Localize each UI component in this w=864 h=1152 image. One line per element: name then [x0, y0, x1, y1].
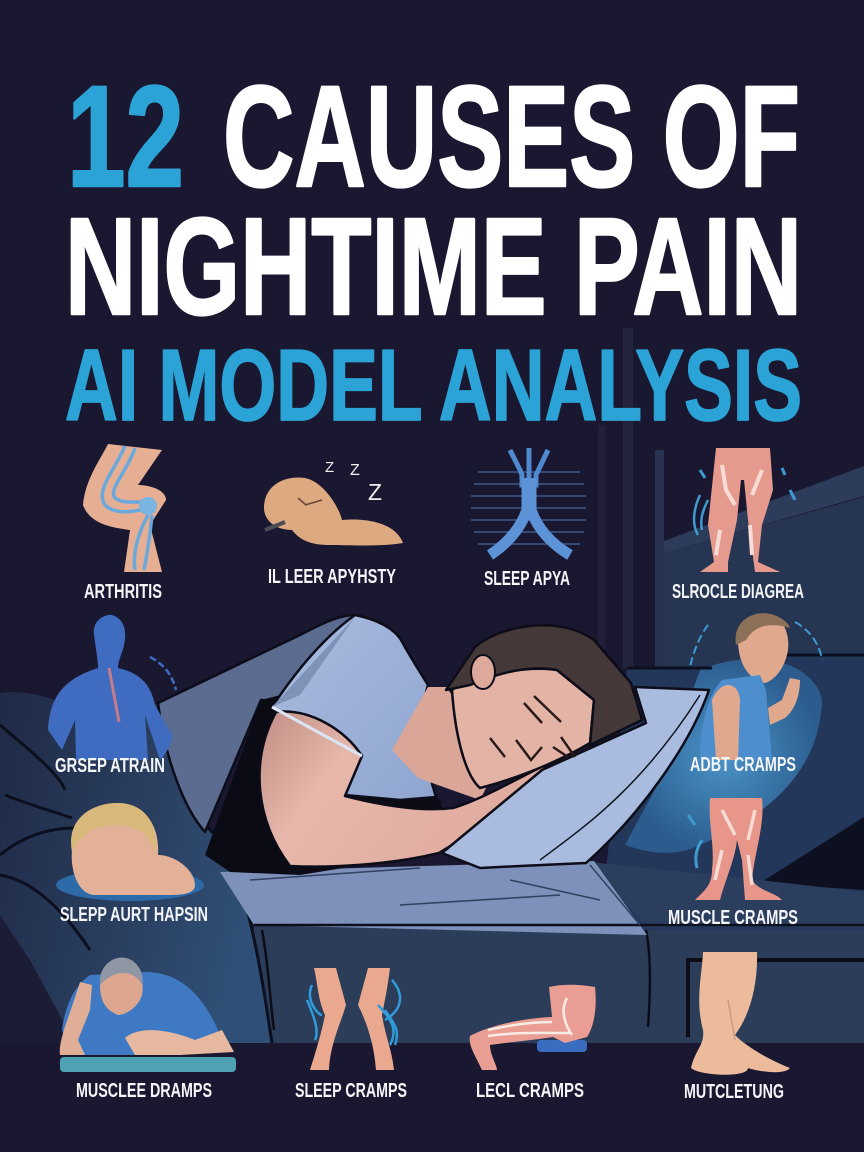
icon: sleeping blond person [56, 803, 204, 901]
icon: sleeping head: Z [350, 462, 360, 479]
icon: knees [307, 968, 400, 1070]
icon: legs [694, 448, 795, 572]
bed front [254, 925, 864, 1043]
shirt [272, 615, 436, 800]
label: muscle cramps: MUSCLE CRAMPS [668, 907, 798, 929]
right bedding [600, 653, 864, 930]
label: lecl cramps: LECL CRAMPS [476, 1080, 584, 1102]
icon: man with fist [690, 613, 822, 760]
icon: standing legs [691, 952, 790, 1075]
label: slepp aurt hapsin: SLEPP AURT HAPSIN [60, 904, 208, 926]
label: mutcletung: MUTCLETUNG [684, 1081, 784, 1103]
hair [446, 625, 642, 745]
icon: foot and calf [470, 985, 596, 1070]
left blanket [0, 692, 272, 1043]
icon: airway [471, 448, 586, 555]
label: sleep apya: SLEEP APYA [484, 568, 570, 590]
icon: sleeping head [264, 459, 403, 546]
label: il leer apyhsty: IL LEER APYHSTY [268, 566, 396, 588]
neck [392, 687, 500, 800]
face lines [490, 696, 575, 760]
label: grsep atrain: GRSEP ATRAIN [55, 755, 165, 777]
gray sleeve blanket [158, 615, 355, 832]
pillow [442, 687, 709, 868]
title [65, 56, 802, 442]
lower right sheet [590, 862, 864, 927]
icon: cramped calves [688, 798, 782, 900]
window and headboard [598, 328, 864, 700]
bed illustration [0, 615, 864, 1152]
bed frame line [688, 960, 864, 1037]
face [452, 669, 594, 788]
arm [260, 712, 545, 867]
label: slrocle diagrea: SLROCLE DIAGREA [672, 581, 804, 603]
dark wedge [760, 817, 864, 890]
label: sleep cramps: SLEEP CRAMPS [295, 1080, 407, 1102]
label: adbt cramps: ADBT CRAMPS [690, 754, 796, 776]
black undershadow [205, 690, 455, 875]
floor [0, 1043, 864, 1152]
glow on bedding [625, 659, 822, 853]
label: arthritis: ARTHRITIS [84, 581, 162, 603]
title: 12 [67, 56, 184, 217]
icon: sleeping head: Z [368, 479, 382, 505]
label: musclee dramps: MUSCLEE DRAMPS [76, 1080, 212, 1102]
ear [471, 655, 495, 689]
icon: blue figure [48, 615, 176, 760]
icon: sleeping head: Z [325, 459, 334, 476]
icon: arthritis knee [83, 444, 166, 572]
icon: man on mat [60, 957, 236, 1072]
mattress sheet [220, 861, 647, 935]
